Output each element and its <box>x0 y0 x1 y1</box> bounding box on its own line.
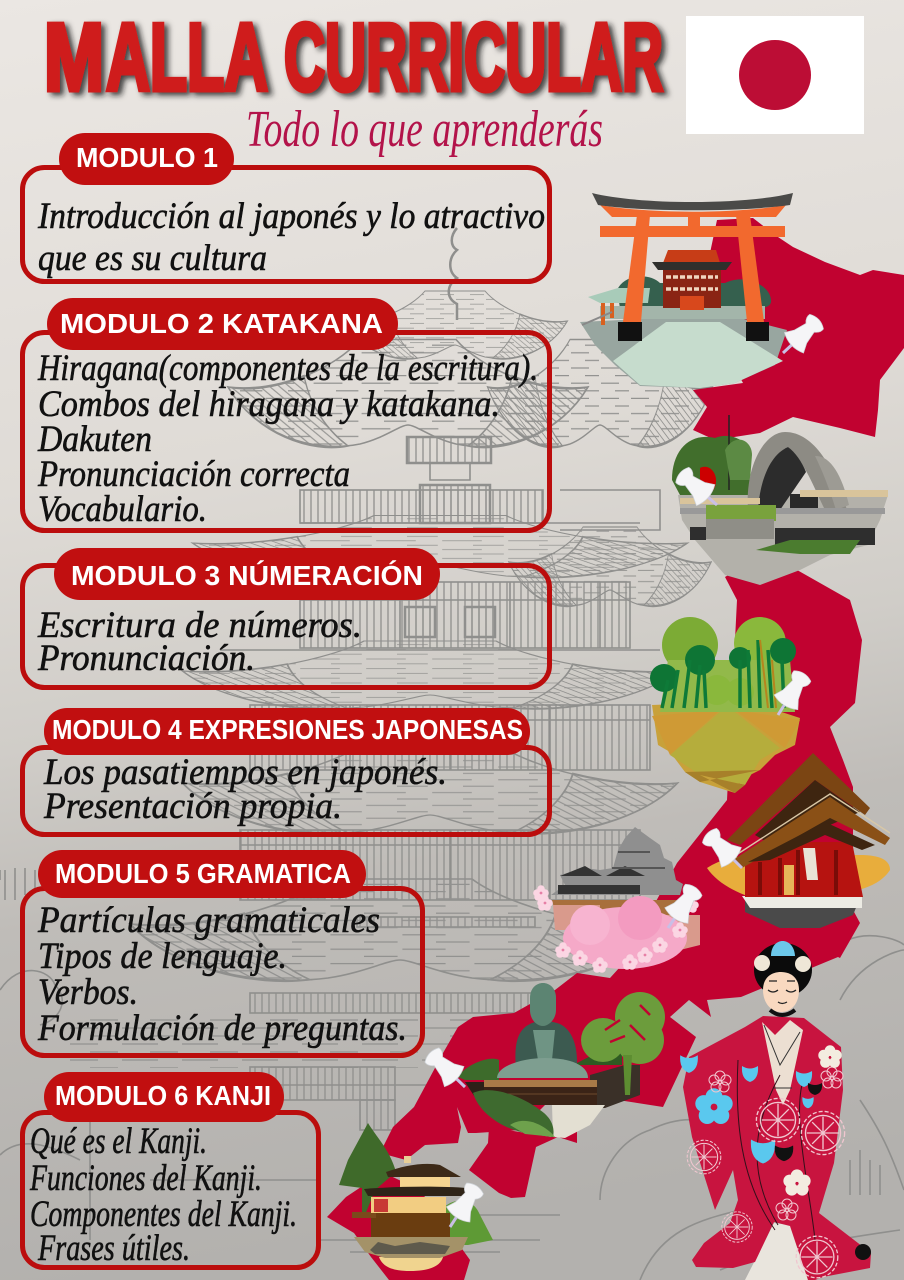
panel: modulo 3 <box>22 548 550 688</box>
text: modulo 5: Formulación de preguntas. <box>37 1008 407 1049</box>
head <box>754 941 812 1015</box>
illustration: Sensoji temple <box>707 753 890 928</box>
text: modulo 6: Qué es el Kanji. <box>30 1121 207 1162</box>
heading: modulo 4: MODULO 4 EXPRESIONES JAPONESAS <box>52 714 523 745</box>
panel: modulo 4 <box>22 708 550 834</box>
icon: pin 1 <box>773 309 828 363</box>
heading: modulo 2 <box>47 298 398 350</box>
text: modulo 2: Pronunciación correcta <box>37 454 350 495</box>
text: modulo 5 <box>37 900 407 1049</box>
kimono underlayer <box>745 1223 815 1280</box>
text: modulo 6: Frases útiles. <box>37 1228 190 1269</box>
map of Japan <box>327 218 904 1280</box>
title: M <box>44 4 104 111</box>
map: north island <box>693 218 904 440</box>
illustration: great Buddha and tree <box>458 983 665 1138</box>
icon: pin 6 <box>420 1043 475 1097</box>
text: modulo 1: que es su cultura <box>38 238 267 279</box>
heading: modulo 3 <box>54 548 440 600</box>
illustration: torii gate and shrine <box>580 193 793 388</box>
icon: pin 7 <box>438 1178 488 1235</box>
map: southern island <box>469 1123 577 1198</box>
heading: modulo 1: MODULO 1 <box>76 142 218 173</box>
map: western island <box>327 1170 470 1280</box>
text: modulo 5: Verbos. <box>38 972 138 1013</box>
heading: modulo 1 <box>59 133 234 185</box>
subtitle: Todo lo que aprenderás <box>246 101 603 158</box>
title: ALLA <box>106 4 268 111</box>
text: modulo 4: Presentación propia. <box>43 786 342 827</box>
heading: modulo 2: MODULO 2 KATAKANA <box>60 308 383 339</box>
text: modulo 6 <box>29 1121 297 1269</box>
panel: modulo 2 <box>22 298 550 530</box>
text: modulo 1 <box>37 196 545 279</box>
text: modulo 2: Vocabulario. <box>38 489 207 530</box>
kimono flowers <box>680 1045 871 1278</box>
text: modulo 5: Tipos de lenguaje. <box>38 936 287 977</box>
panel: modulo 6 <box>22 1072 318 1269</box>
text: modulo 6: Componentes del Kanji. <box>30 1194 297 1235</box>
text: modulo 3: Pronunciación. <box>37 638 255 679</box>
heading: modulo 5 <box>38 850 366 898</box>
text: modulo 6: Funciones del Kanji. <box>29 1158 262 1199</box>
text: modulo 2: Dakuten <box>37 419 152 460</box>
text: modulo 3: Escritura de números. <box>37 605 362 646</box>
kimono collar <box>762 1020 803 1105</box>
illustration: castle and cherry blossoms <box>533 827 700 973</box>
icon: pin 2 <box>671 462 726 516</box>
text: modulo 2: Hiragana(componentes de la escritura). <box>37 348 538 389</box>
text: modulo 4 <box>43 752 447 827</box>
heading: modulo 4 <box>44 708 530 755</box>
icon: pin 5 <box>656 880 707 936</box>
text: modulo 5: Partículas gramaticales <box>37 900 380 941</box>
illustration: golden pavilion <box>339 1123 493 1271</box>
text: modulo 4: Los pasatiempos en japonés. <box>43 752 447 793</box>
title <box>44 4 663 111</box>
icon: pin 4 <box>697 823 752 878</box>
heading: modulo 6: MODULO 6 KANJI <box>55 1080 271 1111</box>
illustration: Hiroshima peace memorial <box>672 415 888 585</box>
text: modulo 2: Combos del hiragana y katakana. <box>38 384 500 425</box>
icon: pin 3 <box>766 666 816 722</box>
icon: flag of Japan <box>686 16 864 134</box>
heading: modulo 5: MODULO 5 GRAMATICA <box>55 858 351 889</box>
heading: modulo 6 <box>44 1072 284 1122</box>
panel: modulo 1 <box>22 133 550 282</box>
map: main island <box>380 565 862 1160</box>
kimono body <box>683 1016 871 1280</box>
text: modulo 2 <box>37 348 538 530</box>
text: modulo 1: Introducción al japonés y lo atractivo <box>37 196 545 237</box>
panel: modulo 5 <box>22 850 422 1056</box>
heading: modulo 3: MODULO 3 NÚMERACIÓN <box>71 560 423 591</box>
illustration: woman in kimono <box>680 941 871 1280</box>
illustration: bamboo forest <box>650 617 800 793</box>
text: modulo 3 <box>37 605 362 679</box>
